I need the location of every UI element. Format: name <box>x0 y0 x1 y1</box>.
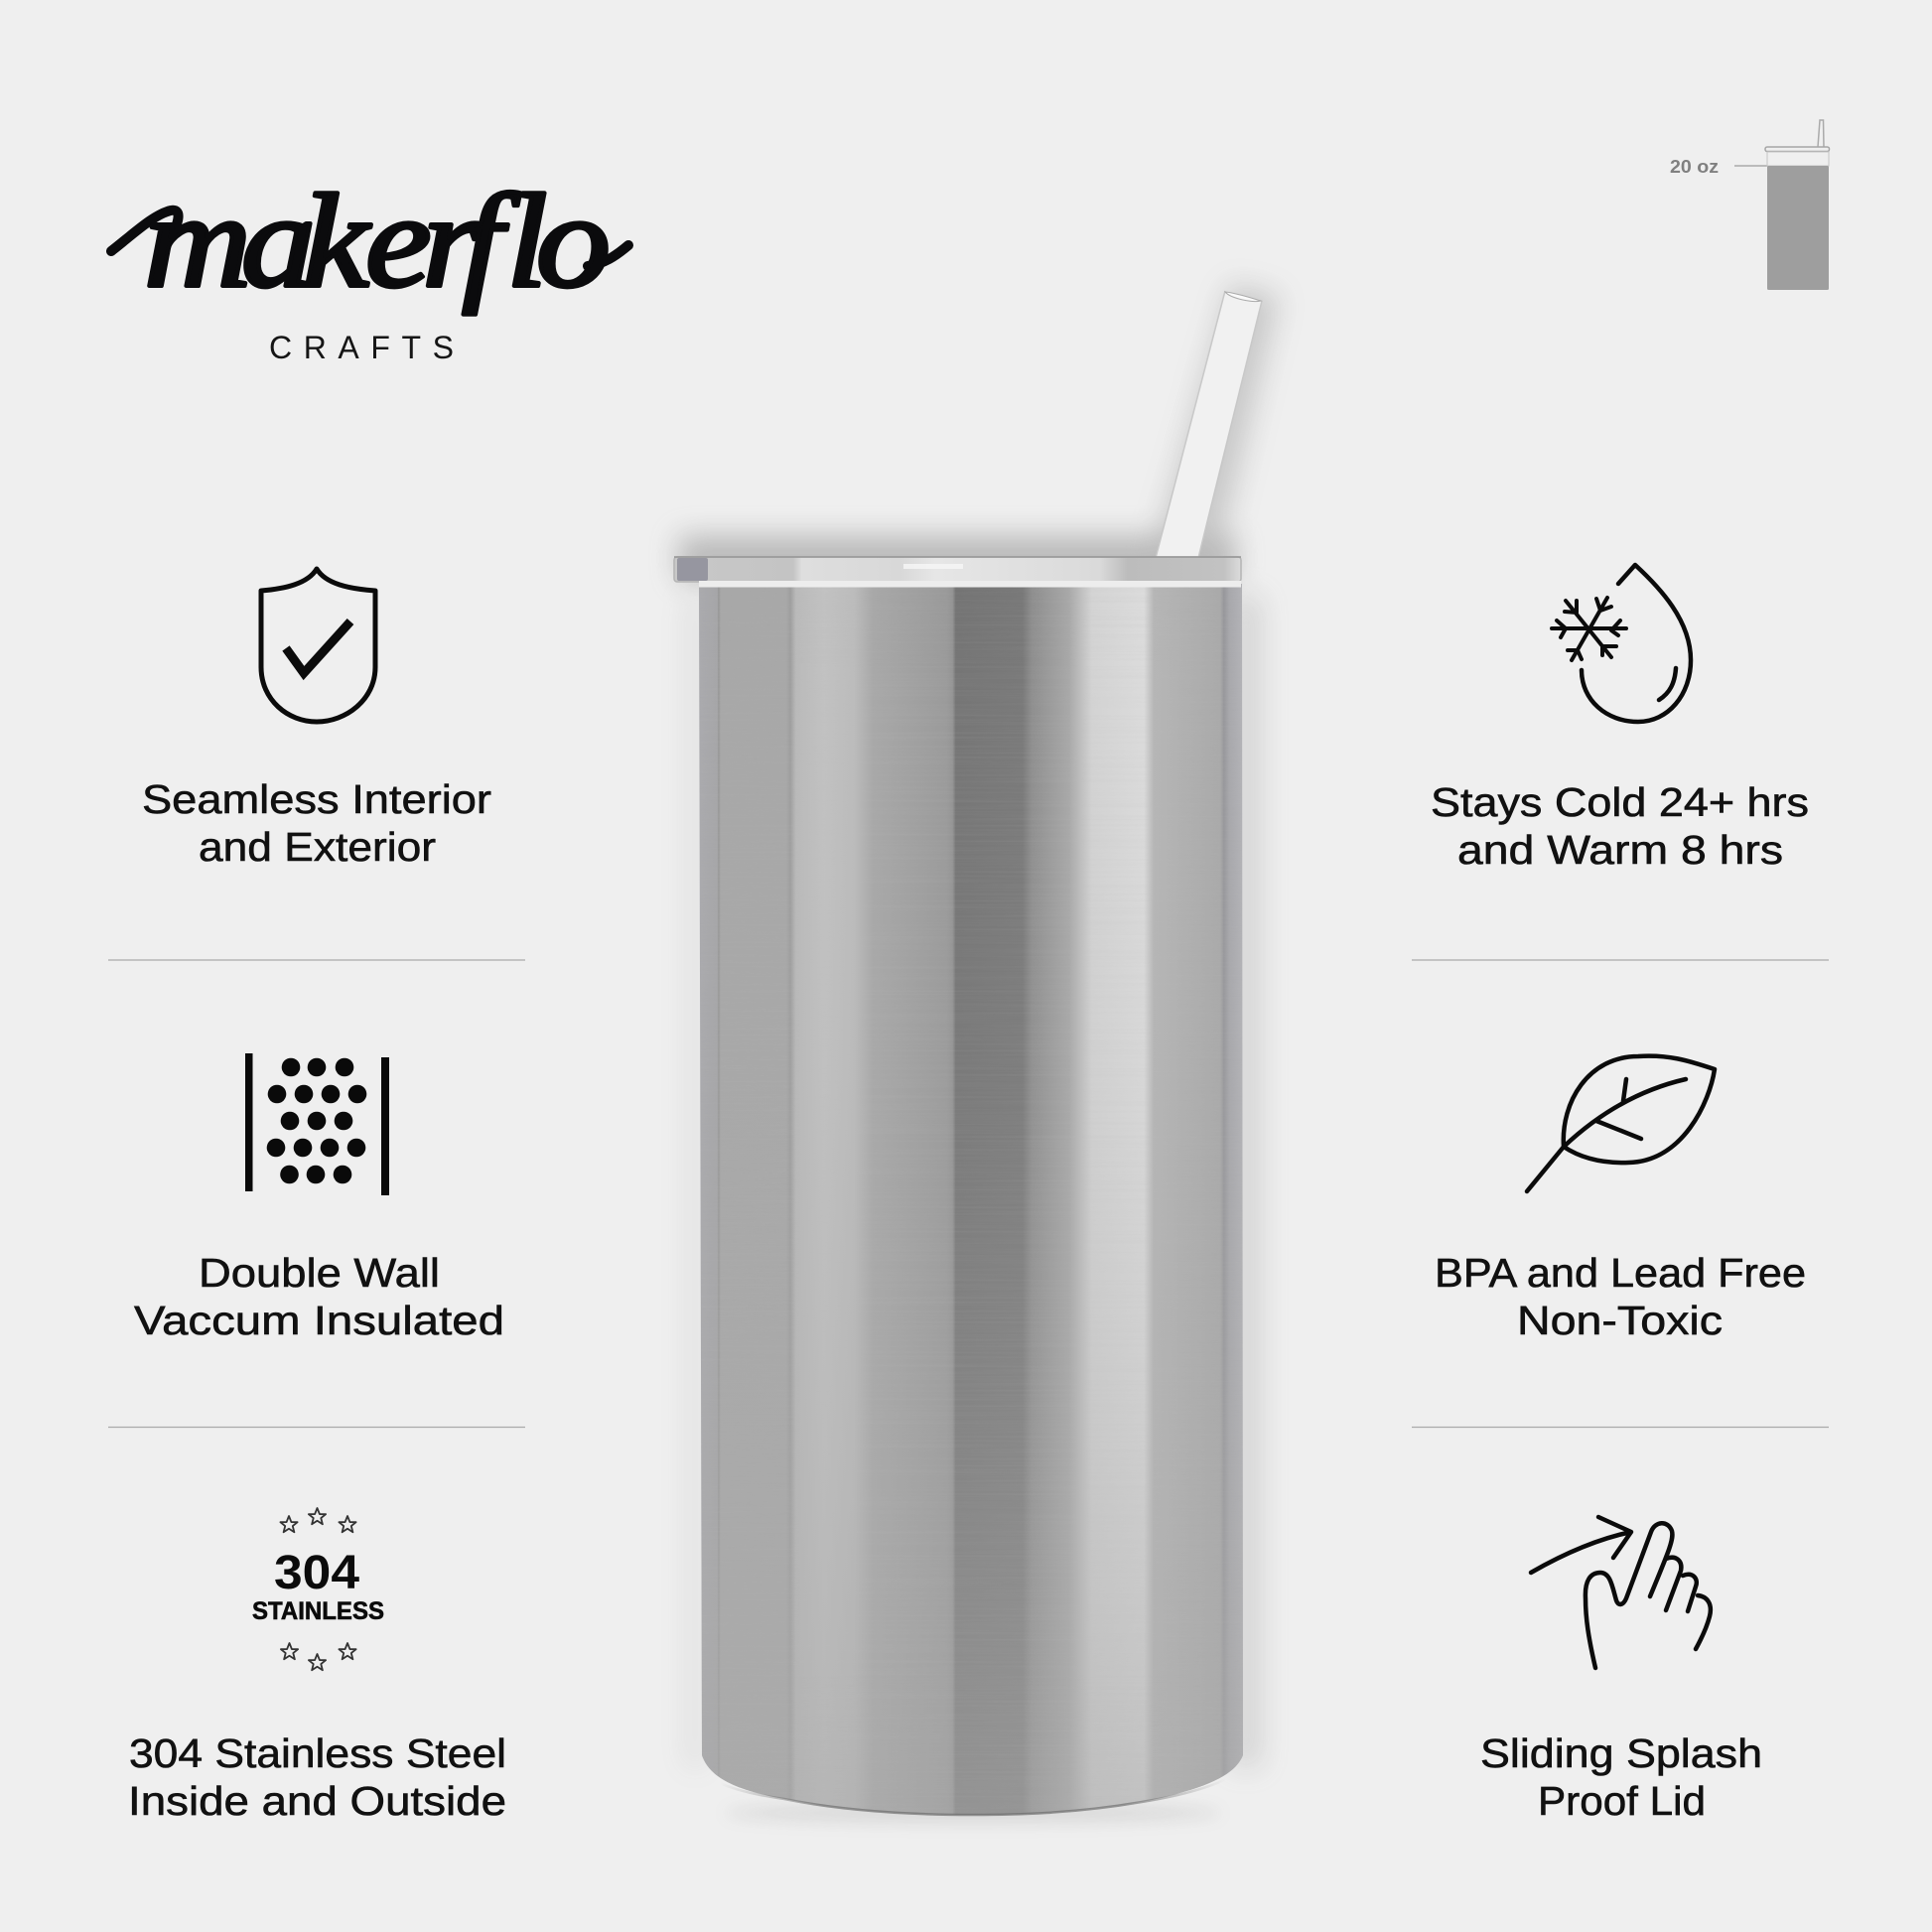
logo subtitle: CRAFTS <box>269 330 454 365</box>
feature text: Proof Lid <box>1538 1778 1706 1824</box>
feature text <box>134 1250 504 1343</box>
icon: 304 stainless badge <box>252 1508 384 1670</box>
feature text: BPA and Lead Free <box>1435 1250 1806 1296</box>
feature text: Non-Toxic <box>1517 1298 1723 1343</box>
feature: sliding splash proof lid <box>1480 1517 1762 1824</box>
feature text: Inside and Outside <box>128 1778 506 1824</box>
feature text: and Warm 8 hrs <box>1457 827 1783 873</box>
icon: shield with check <box>261 569 375 722</box>
feature text <box>128 1730 506 1824</box>
tumbler product image <box>674 284 1279 1823</box>
feature text: Seamless Interior <box>142 776 491 822</box>
icon: 304 stainless badge: STAINLESS <box>252 1597 384 1625</box>
feature text: Sliding Splash <box>1480 1730 1762 1776</box>
feature: seamless interior and exterior <box>142 569 491 870</box>
feature text: 304 Stainless Steel <box>129 1730 506 1776</box>
feature text <box>1480 1730 1762 1824</box>
divider left 2 <box>108 1426 525 1428</box>
icon: double wall dots <box>245 1053 389 1195</box>
infographic canvas <box>106 119 1831 1825</box>
soft shadows <box>679 284 1279 1823</box>
feature: stays cold and warm <box>1431 565 1809 873</box>
feature text <box>1435 1250 1806 1343</box>
steel body <box>699 584 1243 1815</box>
feature: 304 stainless steel <box>128 1508 506 1824</box>
feature text: Stays Cold 24+ hrs <box>1431 779 1809 825</box>
divider right 2 <box>1412 1426 1829 1428</box>
divider left 1 <box>108 959 525 961</box>
size indicator: 20 oz: 20 oz <box>1670 157 1719 177</box>
divider right 1 <box>1412 959 1829 961</box>
icon: water drop with snowflake <box>1552 565 1691 722</box>
logo wordmark: makerflo <box>144 167 611 315</box>
straw <box>1156 291 1262 558</box>
icon: leaf <box>1527 1056 1715 1191</box>
icon: 304 stainless badge: 304 <box>274 1547 359 1599</box>
logo: makerflo crafts <box>111 167 628 365</box>
feature text <box>142 776 491 870</box>
clear lid <box>674 557 1241 588</box>
size indicator: 20 oz <box>1670 120 1829 290</box>
icon: hand swipe with arrow <box>1531 1517 1711 1668</box>
feature text: and Exterior <box>199 824 436 870</box>
feature text <box>1431 779 1809 873</box>
feature: double wall vacuum insulated <box>134 1053 504 1343</box>
feature text: Vaccum Insulated <box>134 1298 504 1343</box>
feature text: Double Wall <box>199 1250 440 1296</box>
feature: BPA and lead free <box>1435 1056 1806 1343</box>
